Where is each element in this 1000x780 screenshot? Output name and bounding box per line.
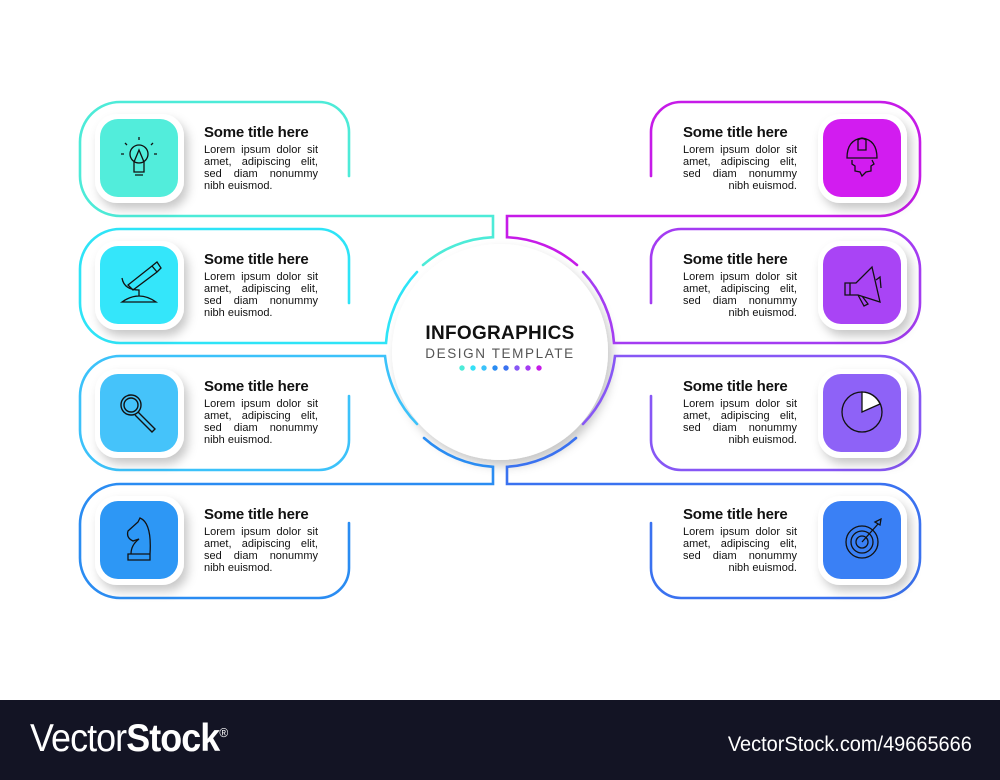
right connector lines <box>507 102 920 598</box>
text block right 2: Some title here <box>683 251 788 268</box>
line: row 4 right <box>507 438 920 598</box>
text block left 4: Some title here <box>204 506 309 523</box>
line: row 4 left <box>80 438 493 598</box>
text block right 3: Some title here <box>683 378 788 395</box>
icon plates <box>95 114 907 585</box>
center title: DESIGN TEMPLATE <box>425 346 575 361</box>
icon: chess knight <box>100 501 178 579</box>
text block left 1: Lorem ipsum dolor sit amet, adipiscing elit, sed diam nonummy nibh euismod. <box>204 144 318 192</box>
left connector lines <box>80 102 493 598</box>
text block right 3: Lorem ipsum dolor sit amet, adipiscing elit, sed diam nonummy nibh euismod. <box>683 398 797 446</box>
icon: lightbulb <box>100 119 178 197</box>
text block right 2: Lorem ipsum dolor sit amet, adipiscing elit, sed diam nonummy nibh euismod. <box>683 271 797 319</box>
icon: timer clock <box>823 374 901 452</box>
center circle <box>392 244 608 460</box>
text block left 2: Some title here <box>204 251 309 268</box>
text block right 4: Some title here <box>683 506 788 523</box>
icon: helmet gear <box>823 119 901 197</box>
icon: microscope <box>100 246 178 324</box>
line: row 1 left <box>80 102 493 265</box>
center title <box>425 323 575 361</box>
text block left 2: Lorem ipsum dolor sit amet, adipiscing elit, sed diam nonummy nibh euismod. <box>204 271 318 319</box>
line: row 3 right <box>583 356 920 470</box>
line: row 2 left <box>80 229 417 343</box>
footer bar <box>0 700 1000 780</box>
text block right 1: Some title here <box>683 124 788 141</box>
text block right 4: Lorem ipsum dolor sit amet, adipiscing elit, sed diam nonummy nibh euismod. <box>683 526 797 574</box>
text block right 1: Lorem ipsum dolor sit amet, adipiscing elit, sed diam nonummy nibh euismod. <box>683 144 797 192</box>
color dots <box>459 365 542 371</box>
icon: magnifier <box>100 374 178 452</box>
line: row 3 left <box>80 356 417 470</box>
text block left 1: Some title here <box>204 124 309 141</box>
text block left 3: Lorem ipsum dolor sit amet, adipiscing elit, sed diam nonummy nibh euismod. <box>204 398 318 446</box>
icon: target <box>823 501 901 579</box>
footer url: VectorStock.com/49665666 <box>728 733 972 756</box>
text block left 3: Some title here <box>204 378 309 395</box>
line: row 2 right <box>583 229 920 343</box>
center title: INFOGRAPHICS <box>425 323 575 344</box>
footer logo: VectorStock® <box>30 717 227 760</box>
text block left 4: Lorem ipsum dolor sit amet, adipiscing elit, sed diam nonummy nibh euismod. <box>204 526 318 574</box>
line: row 1 right <box>507 102 920 265</box>
icon: megaphone <box>823 246 901 324</box>
